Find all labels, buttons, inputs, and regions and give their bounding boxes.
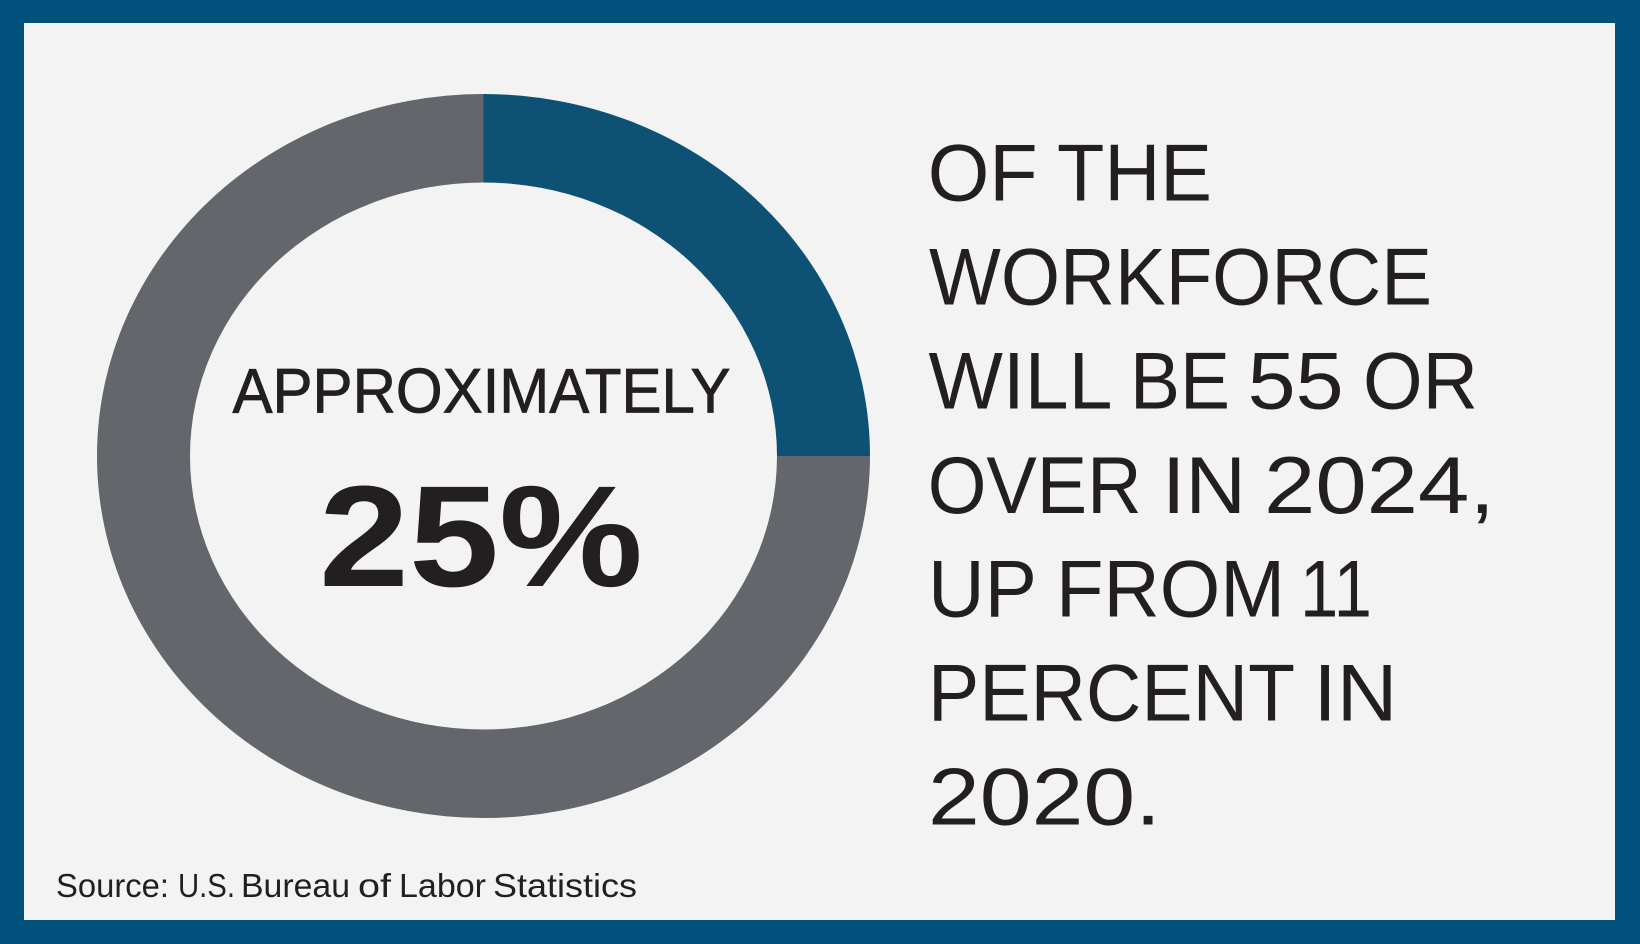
statement text: IN (1313, 649, 1397, 739)
statement text: WORKFORCE (929, 232, 1432, 322)
statement text: 2020. (928, 752, 1161, 842)
statement text: WILL (928, 336, 1112, 426)
source note: U.S. (178, 867, 235, 904)
source note: Labor (399, 867, 486, 904)
statement text: IN (1162, 441, 1246, 531)
donut segment: 25 percent (484, 94, 870, 456)
donut value: 25%: 25% (319, 456, 643, 617)
statement text: OVER (928, 441, 1142, 531)
statement text: UP (928, 545, 1037, 635)
statement text: OF (928, 129, 1038, 219)
source note: Statistics (493, 867, 637, 904)
source note (56, 867, 637, 904)
statement text: 2024, (1264, 441, 1495, 531)
source note: Source: (56, 867, 169, 904)
statement text: OR (1363, 336, 1478, 426)
source note: of (358, 867, 392, 904)
donut label: approximately: APPROXIMATELY (232, 356, 730, 426)
statement text: 11 (1300, 543, 1372, 634)
statement text: THE (1057, 129, 1212, 219)
statement text: BE (1130, 336, 1230, 426)
statement text (928, 129, 1495, 842)
statement text: FROM (1056, 545, 1285, 635)
statement text: 55 (1248, 336, 1344, 426)
source note: Bureau (241, 867, 350, 904)
donut chart (97, 94, 870, 818)
statement text: PERCENT (928, 649, 1295, 739)
donut segment: remaining 75 percent (97, 94, 870, 818)
